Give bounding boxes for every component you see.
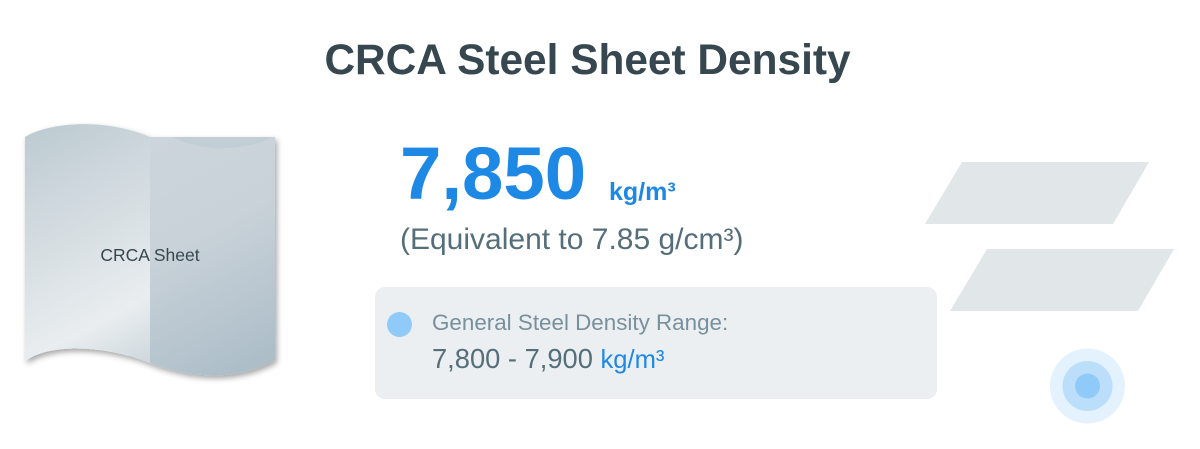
equivalent value: (Equivalent to 7.85 g/cm³): [400, 223, 744, 256]
icon: blue dot: [387, 312, 412, 337]
range label: General Steel Density Range:: [432, 310, 728, 335]
icon: steel sheet illustration: [24, 124, 280, 382]
title: CRCA Steel Sheet Density: [324, 36, 851, 83]
sheet label: CRCA Sheet: [100, 245, 200, 265]
density unit: kg/m³: [609, 178, 676, 206]
panel: general steel density range: [375, 287, 937, 399]
upper parallelogram: [925, 162, 1149, 224]
range value: 7,800 - 7,900 kg/m³: [432, 343, 664, 374]
icon: concentric circles: [1050, 348, 1125, 424]
decorative parallelograms and target: [925, 162, 1174, 424]
main density value: 7,850: [400, 132, 586, 215]
lower parallelogram: [950, 249, 1174, 311]
